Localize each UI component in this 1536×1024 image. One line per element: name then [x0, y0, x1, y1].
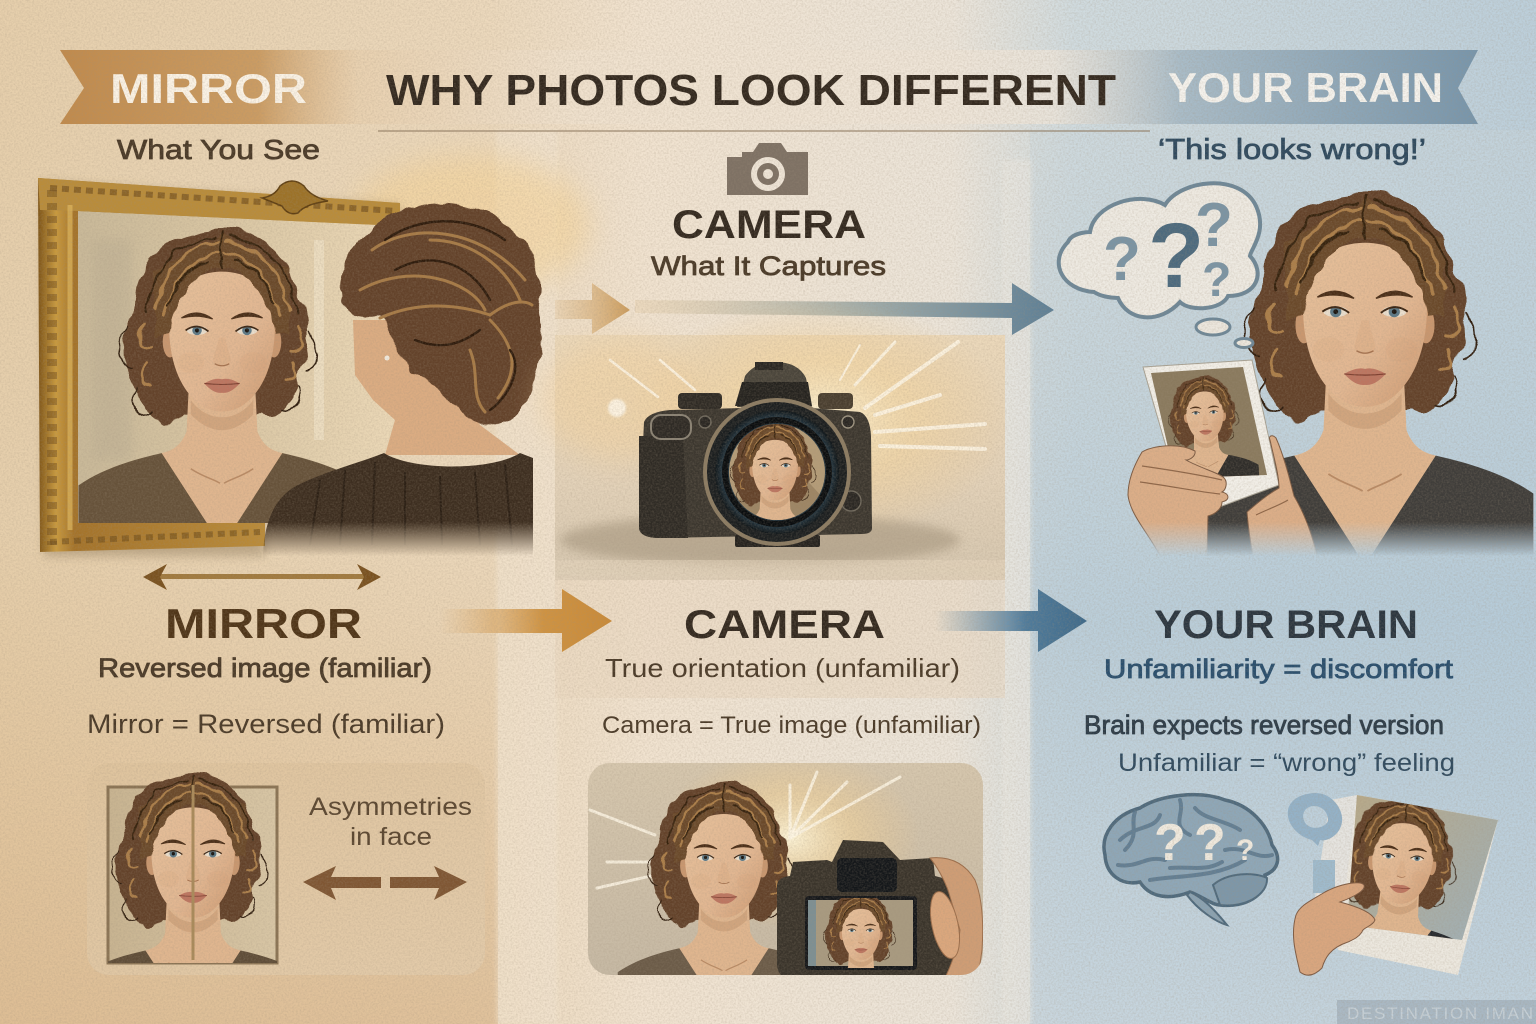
panel: asymmetries [87, 772, 485, 975]
main title: WHY PHOTOS LOOK DIFFERENT [386, 66, 1116, 115]
light burst [588, 770, 902, 890]
polaroid photo [1143, 360, 1279, 506]
caption: reversed image: Reversed image (familiar) [98, 653, 432, 683]
icon: camera [727, 143, 808, 195]
thought bubble tail [1196, 319, 1253, 348]
brain with question marks [1104, 795, 1278, 925]
banner label: mirror: MIRROR [110, 65, 307, 112]
watermark: DESTINATION IMAN [1347, 1004, 1533, 1023]
brain with question marks: ? [1236, 834, 1254, 867]
portrait with center line [106, 772, 278, 964]
printed photo [1338, 795, 1498, 975]
woman portrait [1197, 193, 1533, 556]
hand holding photo [1128, 436, 1317, 556]
brain with question marks: ? [1194, 814, 1226, 872]
subtitle: what you see: What You See [117, 134, 320, 165]
thought bubble with question marks: ? [1148, 205, 1204, 307]
heading: camera lower: CAMERA [684, 603, 885, 647]
caption: discomfort: Unfamiliarity = discomfort [1104, 654, 1454, 684]
scene: hand holding printed photo [1288, 792, 1498, 984]
speech icon [1288, 793, 1342, 846]
panel: camera scene [540, 300, 1010, 580]
hand [1293, 883, 1375, 975]
arrow: mirror to camera top [555, 283, 630, 334]
light burst [540, 300, 1010, 540]
note: camera true image: Camera = True image (unfamiliar) [602, 712, 981, 739]
label: asymmetries in face: Asymmetries [309, 793, 472, 821]
heading: mirror: MIRROR [165, 600, 362, 647]
mirror glass with reflection [78, 211, 400, 538]
woman from behind [263, 202, 541, 556]
thought bubble with question marks [1059, 183, 1260, 348]
camera body [639, 362, 872, 547]
scene: woman holding photo [1128, 193, 1533, 556]
mirror frame [38, 178, 400, 556]
small camera [777, 840, 952, 975]
title underline [378, 130, 1150, 132]
thought bubble with question marks: ? [1195, 191, 1233, 260]
double arrow under mirror [143, 564, 381, 590]
subtitle: this looks wrong: ‘This looks wrong!’ [1158, 134, 1426, 166]
note: mirror reversed: Mirror = Reversed (familiar) [87, 709, 445, 739]
panel: camera selfie [588, 763, 983, 975]
title banner ribbon [60, 50, 1478, 131]
camera lens [703, 398, 851, 555]
scene: mirror and woman [38, 178, 541, 556]
arrow: camera to brain [935, 589, 1087, 652]
hand on camera [925, 858, 983, 978]
thought bubble with question marks: ? [1103, 225, 1141, 294]
heading: camera: CAMERA [672, 203, 866, 247]
label: asymmetries in face: in face [350, 823, 432, 851]
heading: your brain: YOUR BRAIN [1154, 603, 1418, 647]
thought bubble with question marks: ? [1202, 254, 1231, 307]
arrows: asymmetry [303, 866, 467, 900]
arrow: mirror to camera [440, 589, 612, 652]
brain with question marks: ? [1154, 814, 1186, 872]
subtitle: what it captures: What It Captures [651, 251, 886, 281]
note: unfamiliar wrong feeling: Unfamiliar = “wrong” feeling [1118, 749, 1455, 777]
note: brain expects: Brain expects reversed version [1084, 710, 1444, 740]
caption: true orientation: True orientation (unfamiliar) [605, 653, 960, 683]
arrow: long camera to brain [635, 283, 1054, 335]
banner label: your brain: YOUR BRAIN [1168, 64, 1443, 111]
